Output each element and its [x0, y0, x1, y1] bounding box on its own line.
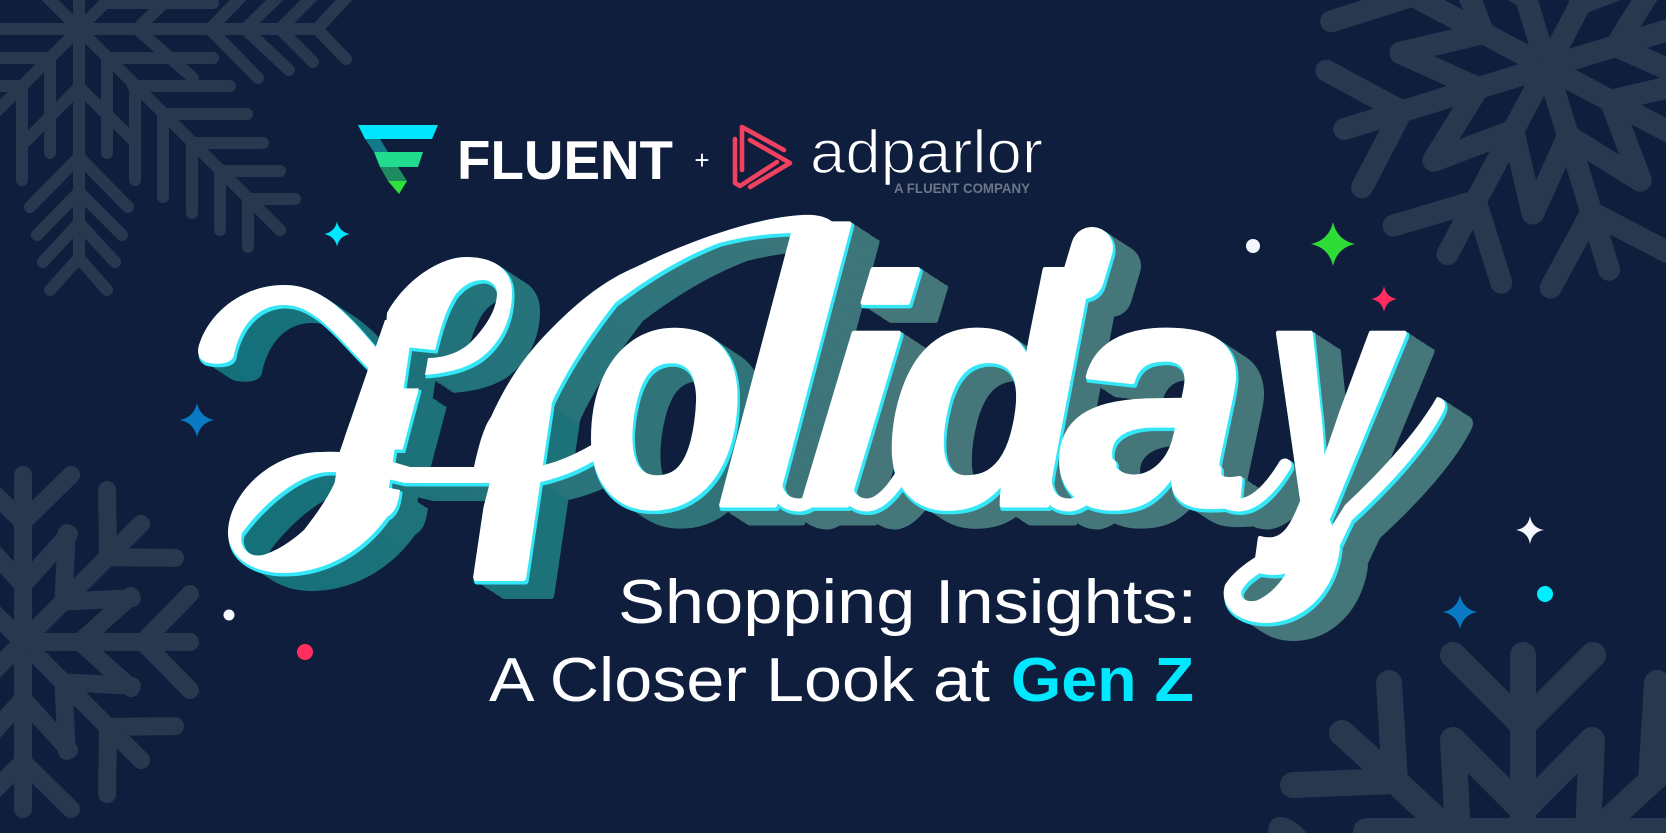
letter i: i — [790, 212, 924, 575]
icon: adparlor play mark — [735, 127, 790, 187]
flourish: left curl — [198, 285, 378, 372]
flourish: d ascender extension — [1083, 248, 1092, 278]
title extrusion shadow: y — [1254, 212, 1408, 576]
title extrusion shadow — [198, 214, 1473, 641]
logo: Fluent — [358, 125, 673, 194]
snowflake: bottom left — [0, 475, 190, 809]
title extrusion shadow: o — [585, 212, 744, 575]
subtitle highlight: Gen Z: Gen Z — [1011, 646, 1194, 715]
letter H: H — [318, 173, 572, 672]
flourish: top arch — [474, 215, 835, 467]
flourish: upper loop — [385, 257, 512, 375]
icon: Fluent mark — [358, 125, 438, 194]
wordmark: FLUENT: FLUENT — [457, 129, 673, 191]
subtitle line 2: A Closer Look at — [489, 646, 990, 715]
letter d: d — [885, 211, 1093, 574]
subtitle line 1: Shopping Insights: — [618, 568, 1197, 637]
logo: adparlor — [735, 118, 1043, 196]
title: Holiday — [198, 214, 1473, 641]
letter y: y — [1254, 212, 1408, 576]
letter o: o — [585, 212, 744, 575]
flourish: lower loop and crossbar — [228, 440, 600, 573]
title extrusion shadow: d — [885, 211, 1093, 574]
snowflake: bottom right — [1268, 655, 1666, 833]
title white letters — [198, 214, 1448, 626]
plus sign: + — [694, 145, 710, 175]
flourish: baseline connectors — [775, 460, 1285, 505]
subtitle — [489, 568, 1197, 715]
title extrusion shadow: a — [1060, 210, 1250, 574]
letter a: a — [1060, 210, 1250, 574]
snowflake: top right — [1282, 0, 1666, 332]
title extrusion shadow: H — [318, 173, 572, 672]
wordmark: adparlor: adparlor — [810, 118, 1043, 186]
sparkles and dots — [180, 222, 1553, 660]
letter l: l — [709, 154, 855, 588]
flourish: exit stroke — [1318, 397, 1445, 560]
snowflake: top left — [0, 0, 346, 290]
title extrusion shadow: l — [709, 154, 855, 588]
flourish: descender loop — [1224, 520, 1340, 623]
tagline: A FLUENT COMPANY — [894, 181, 1030, 196]
title extrusion shadow: i — [790, 212, 924, 575]
